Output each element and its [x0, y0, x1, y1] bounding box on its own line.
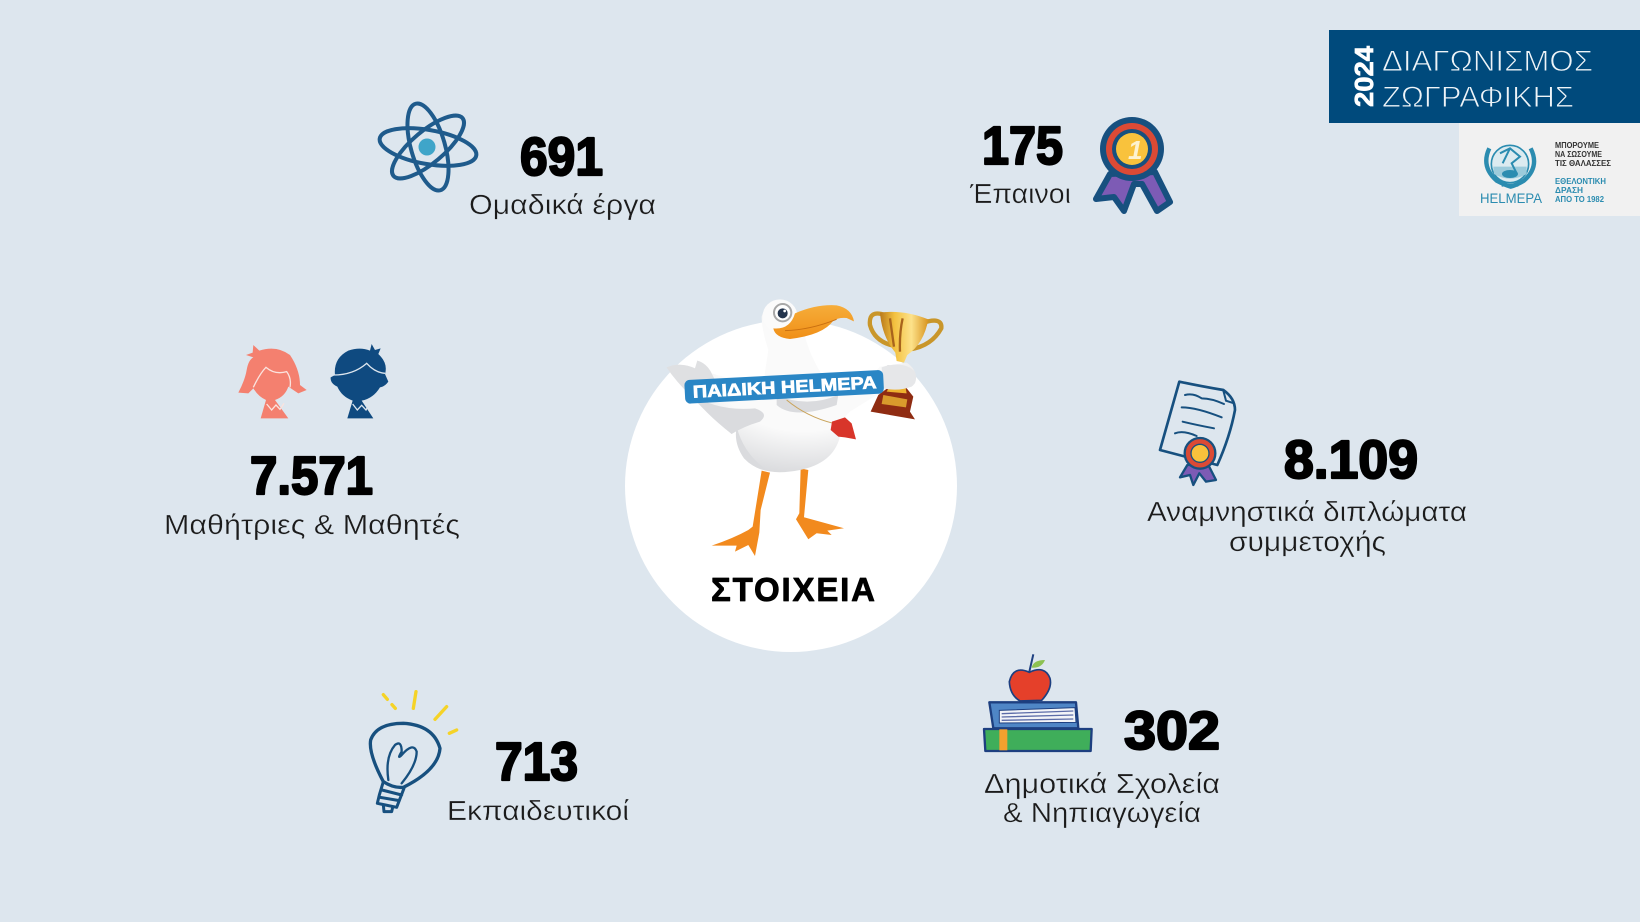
- label: [984, 768, 1220, 828]
- label: Έπαινοι: [969, 178, 1071, 209]
- gull head and beak: [763, 299, 854, 339]
- icon: apple on books: [984, 654, 1092, 751]
- number 7.571: 7.571: [250, 446, 373, 506]
- icon: girl: [238, 345, 307, 418]
- banner: ΠΑΙΔΙΚΗ HELMEPA: ΠΑΙΔΙΚΗ HELMEPA: [692, 372, 878, 402]
- number 8.109: 8.109: [1284, 430, 1418, 490]
- gull body and wings: [667, 302, 916, 472]
- label: & Νηπιαγωγεία: [1003, 797, 1201, 828]
- header banner: drawing competition 2024: [1329, 30, 1640, 123]
- HELMEPA logo panel: ΔΡΑΣΗ: [1555, 186, 1583, 195]
- stat: schools: [984, 654, 1220, 828]
- number 175: 175: [982, 116, 1063, 176]
- whistle: [831, 417, 856, 439]
- header banner: drawing competition 2024: 2024: [1349, 45, 1379, 107]
- HELMEPA logo panel: ΤΙΣ ΘΑΛΑΣΣΕΣ: [1555, 159, 1611, 168]
- central white circle: [625, 320, 957, 652]
- label: Εκπαιδευτικοί: [447, 795, 629, 826]
- banner: ΠΑΙΔΙΚΗ HELMEPA: [684, 370, 884, 404]
- label: συμμετοχής: [1229, 526, 1386, 557]
- header banner: drawing competition 2024: ΖΩΓΡΑΦΙΚΗΣ: [1382, 81, 1574, 114]
- seagull mascot with trophy: [667, 299, 941, 556]
- number 713: 713: [495, 732, 578, 792]
- header banner: drawing competition 2024: ΔΙΑΓΩΝΙΣΜΟΣ: [1382, 45, 1593, 78]
- trophy: [870, 312, 941, 419]
- label: Ομαδικά έργα: [469, 189, 656, 220]
- label: Δημοτικά Σχολεία: [984, 768, 1220, 799]
- icon: boy: [331, 344, 388, 418]
- label: [1147, 496, 1467, 557]
- HELMEPA logo panel: [1459, 123, 1640, 216]
- icon: medal rosette: [1096, 117, 1170, 211]
- HELMEPA logo panel: ΜΠΟΡΟΥΜΕ: [1555, 141, 1599, 150]
- HELMEPA logo panel: ΕΘΕΛΟΝΤΙΚΗ: [1555, 177, 1606, 186]
- gull legs and feet: [712, 468, 844, 556]
- label: Μαθήτριες & Μαθητές: [164, 509, 460, 540]
- HELMEPA logo panel: HELMEPA: [1480, 191, 1542, 206]
- icon: medal rosette: 1: [1128, 135, 1142, 165]
- stat: participation diplomas: [1147, 382, 1467, 557]
- icon: atom: [377, 99, 479, 195]
- stat: teachers: [370, 692, 629, 826]
- heading: ΣΤΟΙΧΕΙΑ: ΣΤΟΙΧΕΙΑ: [711, 571, 875, 608]
- HELMEPA logo panel: ΝΑ ΣΩΣΟΥΜΕ: [1555, 150, 1602, 159]
- number 302: 302: [1124, 701, 1220, 761]
- icon: light bulb: [370, 692, 457, 812]
- number 691: 691: [520, 127, 603, 187]
- stat: team projects: [377, 99, 656, 220]
- stat: awards: [969, 116, 1170, 211]
- gull wing holding trophy: [882, 364, 916, 390]
- label: Αναμνηστικά διπλώματα: [1147, 496, 1467, 527]
- stat: students: [164, 344, 460, 540]
- icon: diploma: [1160, 382, 1235, 485]
- HELMEPA logo panel: ΑΠΟ ΤΟ 1982: [1555, 195, 1605, 204]
